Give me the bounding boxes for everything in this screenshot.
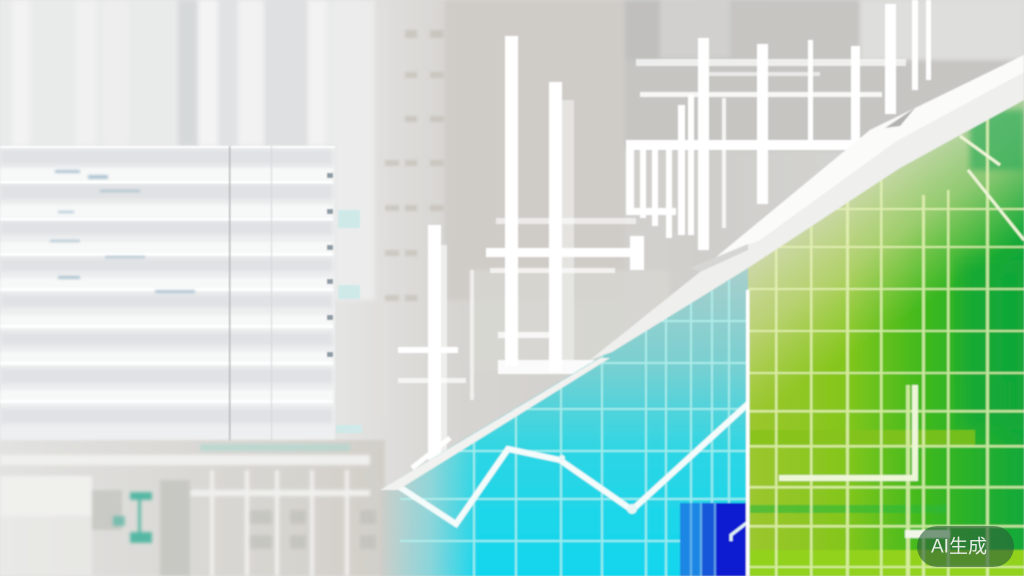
panel: upper left pale columns bbox=[0, 0, 389, 420]
bar: blue block bbox=[680, 503, 748, 576]
panel: grey upper right backdrop bbox=[445, 0, 1024, 370]
panel: cyan chart area bbox=[380, 268, 750, 576]
badge: AI generated: AI生成 bbox=[931, 536, 987, 558]
arrow: white diagonal band bbox=[380, 55, 1024, 490]
line: white small arrow bbox=[731, 522, 748, 541]
panel: window grid in centre bbox=[385, 30, 444, 301]
panel: lower left building bbox=[0, 440, 385, 576]
line: white inner chart stroke bbox=[779, 136, 1024, 478]
panel: left horizontal shelves bbox=[0, 146, 362, 446]
line chart: white trend line bbox=[398, 402, 750, 524]
panel: white chart bars and scaffolding bbox=[398, 0, 931, 460]
white divider between cyan and green bbox=[746, 290, 750, 576]
badge: AI generated bbox=[917, 526, 1014, 567]
panel: green chart area bbox=[748, 80, 1024, 576]
